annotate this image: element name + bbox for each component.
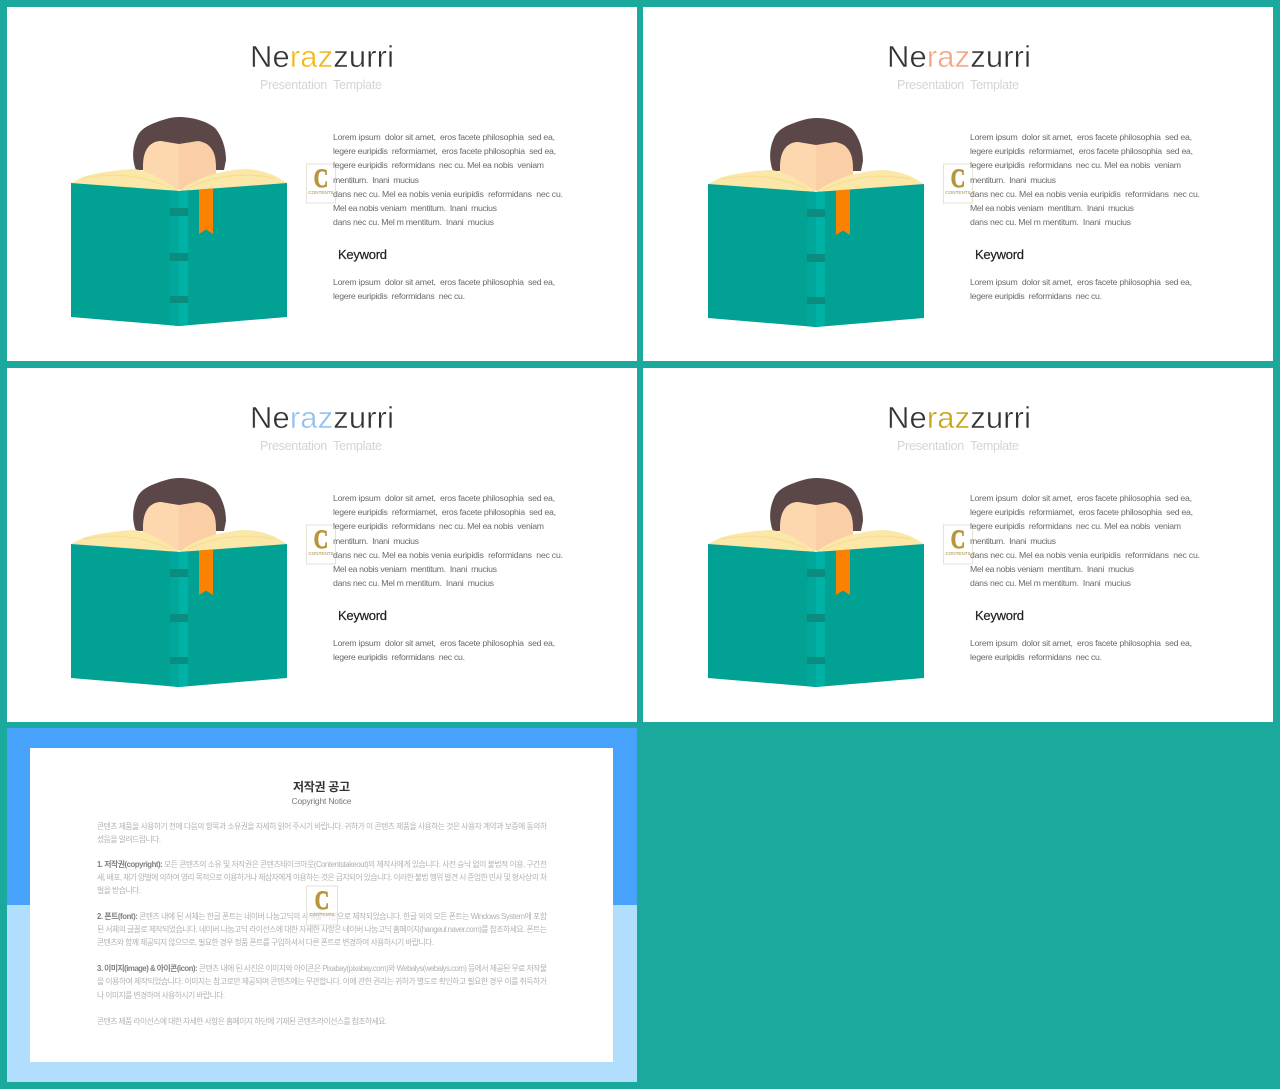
closing note: 콘텐츠 제품 라이선스에 대한 자세한 사항은 홈페이지 하단에 기재된 콘텐츠라이선스를 참조하세요. <box>97 1016 387 1026</box>
panel: slide 4 <box>643 368 1273 722</box>
title: Nerazzurri <box>250 39 394 74</box>
body text: legere euripidis reformiamet, eros facete philosophia sed ea, <box>970 507 1193 517</box>
section 2: font: 2. 폰트(font): 콘텐츠 내에 된 서체는 한글 폰트는 네이버 나눔고딕의 서체를 기반으로 제작되었습니다. 한글 외의 모든 폰트는 Windows System에 포함 <box>97 911 547 921</box>
intro text: 콘텐츠 제품을 사용하기 전에 다음의 항목과 소유권을 자세히 읽어 주시기 바랍니다. 귀하가 이 콘텐츠 제품을 사용하는 것은 사용자 계약과 보증에 동의하 <box>97 821 547 831</box>
body text <box>970 132 1200 227</box>
body text: dans nec cu. Mel ea nobis venia euripidis reformidans nec cu. <box>970 550 1200 560</box>
illustration: person reading book <box>708 478 924 687</box>
watermark logo: CONTENTS <box>945 190 971 195</box>
body text: legere euripidis reformiamet, eros facete philosophia sed ea, <box>333 146 556 156</box>
watermark logo <box>306 886 338 925</box>
body text: mentitum. Inani mucius <box>333 175 420 185</box>
title: Nerazzurri <box>887 39 1031 74</box>
section 2: font: 콘텐츠와 함께 제공되지 않으므로, 필요한 경우 정품 폰트를 구입하셔서 다른 폰트로 변경하여 사용하시기 바랍니다. <box>97 937 434 947</box>
body text: Lorem ipsum dolor sit amet, eros facete philosophia sed ea, <box>333 493 555 503</box>
panel: slide 3 <box>7 368 637 722</box>
watermark logo <box>306 164 336 203</box>
keyword heading: Keyword <box>338 608 387 623</box>
body text: dans nec cu. Mel ea nobis venia euripidis reformidans nec cu. <box>333 189 563 199</box>
title: Nerazzurri <box>887 400 1031 435</box>
illustration: person reading book <box>708 118 924 327</box>
intro text <box>97 821 547 844</box>
body text: dans nec cu. Mel ea nobis venia euripidis reformidans nec cu. <box>970 189 1200 199</box>
section 1: copyright: 벌을 받습니다. <box>97 885 141 895</box>
subtitle: Presentation Template <box>260 78 382 92</box>
section 2: font: 된 서체의 글꼴로 제작되었습니다. 네이버 나눔고딕 라이선스에 대한 자세한 사항은 네이버 나눔고딕 홈페이지(hangeul.naver.com)를 참조하세요. 폰트는 <box>97 924 547 934</box>
notice heading: 저작권 공고 <box>293 779 350 794</box>
body text: Mel ea nobis veniam mentitum. Inani mucius <box>970 203 1135 213</box>
body text: dans nec cu. Mel m mentitum. Inani mucius <box>970 217 1132 227</box>
body text: mentitum. Inani mucius <box>333 536 420 546</box>
panel: slide 2 <box>643 7 1273 361</box>
watermark logo: CONTENTS <box>309 912 335 917</box>
watermark logo: C <box>314 165 328 194</box>
section 3: image and icon: 나 이미지를 변경하여 사용하시기 바랍니다. <box>97 990 225 1000</box>
watermark logo: C <box>314 526 328 555</box>
keyword text: Lorem ipsum dolor sit amet, eros facete philosophia sed ea, <box>333 638 555 648</box>
section 1: copyright: 세, 배포, 재기 양벌에 의하여 영리 목적으로 이용하거나 제삼자에게 이용하는 것은 금지되어 있습니다. 이러한 불법 행위 발견 시 준엄한 민사 및 형사상의 처 <box>97 872 547 882</box>
title: Nerazzurri <box>250 400 394 435</box>
body text: legere euripidis reformiamet, eros facete philosophia sed ea, <box>970 146 1193 156</box>
body text: Lorem ipsum dolor sit amet, eros facete philosophia sed ea, <box>333 132 555 142</box>
keyword text: legere euripidis reformidans nec cu. <box>970 652 1102 662</box>
body text: mentitum. Inani mucius <box>970 536 1057 546</box>
body text: legere euripidis reformidans nec cu. Mel ea nobis veniam <box>333 160 544 170</box>
keyword text <box>333 638 555 662</box>
body text: legere euripidis reformiamet, eros facete philosophia sed ea, <box>333 507 556 517</box>
panel: slide 1 <box>7 7 637 361</box>
body text: legere euripidis reformidans nec cu. Mel ea nobis veniam <box>333 521 544 531</box>
keyword text <box>970 638 1192 662</box>
watermark logo: CONTENTS <box>308 190 334 195</box>
body text: Mel ea nobis veniam mentitum. Inani mucius <box>333 564 498 574</box>
body text: dans nec cu. Mel m mentitum. Inani mucius <box>970 578 1132 588</box>
watermark logo: CONTENTS <box>945 551 971 556</box>
watermark logo <box>944 164 972 203</box>
body text: legere euripidis reformidans nec cu. Mel ea nobis veniam <box>970 160 1181 170</box>
keyword text: Lorem ipsum dolor sit amet, eros facete philosophia sed ea, <box>970 638 1192 648</box>
body text <box>333 132 563 227</box>
keyword text: legere euripidis reformidans nec cu. <box>333 291 465 301</box>
section 1: copyright: 1. 저작권(copyright): 모든 콘텐츠의 소유 및 저작권은 콘텐츠테이크아웃(Contentstakeout)의 제작사에게 있습니다. 사전 승낙 없이 불법적 이용, 구간전 <box>97 859 547 869</box>
intro text: 셨음을 알려드립니다. <box>97 834 161 844</box>
section 3: image and icon <box>97 963 547 1000</box>
keyword text: legere euripidis reformidans nec cu. <box>970 291 1102 301</box>
body text <box>333 493 563 588</box>
section 3: image and icon: 을 이용하여 제작되었습니다. 이미지는 참고로만 제공되며 콘텐츠에는 무관합니다. 이에 관한 권리는 귀하가 별도로 확인하고 필요한 경우 이를 취득하거 <box>97 976 547 986</box>
watermark logo: CONTENTS <box>308 551 334 556</box>
section 2: font <box>97 911 547 947</box>
watermark logo: C <box>951 526 965 555</box>
keyword text: Lorem ipsum dolor sit amet, eros facete philosophia sed ea, <box>333 277 555 287</box>
body text <box>970 493 1200 588</box>
body text: Mel ea nobis veniam mentitum. Inani mucius <box>970 564 1135 574</box>
keyword text: legere euripidis reformidans nec cu. <box>333 652 465 662</box>
keyword heading: Keyword <box>975 608 1024 623</box>
body text: legere euripidis reformidans nec cu. Mel ea nobis veniam <box>970 521 1181 531</box>
subtitle: Presentation Template <box>897 439 1019 453</box>
keyword text: Lorem ipsum dolor sit amet, eros facete philosophia sed ea, <box>970 277 1192 287</box>
body text: mentitum. Inani mucius <box>970 175 1057 185</box>
watermark logo: C <box>315 887 329 916</box>
keyword heading: Keyword <box>338 247 387 262</box>
body text: Mel ea nobis veniam mentitum. Inani mucius <box>333 203 498 213</box>
body text: dans nec cu. Mel m mentitum. Inani mucius <box>333 217 495 227</box>
panel: copyright notice <box>7 728 637 1082</box>
illustration: person reading book <box>71 478 287 687</box>
keyword text <box>970 277 1192 301</box>
illustration: person reading book <box>71 117 287 326</box>
section 3: image and icon: 3. 이미지(image) & 아이콘(icon): 콘텐츠 내에 된 사진은 이미지와 아이콘은 Pixabay(pixabay.com)와 Webalys(webalys.com) 등에서 제공된 무료 저작물 <box>97 963 547 973</box>
watermark logo: C <box>951 165 965 194</box>
body text: dans nec cu. Mel m mentitum. Inani mucius <box>333 578 495 588</box>
keyword text <box>333 277 555 301</box>
body text: Lorem ipsum dolor sit amet, eros facete philosophia sed ea, <box>970 493 1192 503</box>
subtitle: Presentation Template <box>260 439 382 453</box>
keyword heading: Keyword <box>975 247 1024 262</box>
subtitle: Presentation Template <box>897 78 1019 92</box>
watermark logo <box>306 525 336 564</box>
section 1: copyright <box>97 859 547 895</box>
watermark logo <box>944 525 972 564</box>
notice subheading: Copyright Notice <box>292 796 352 806</box>
body text: Lorem ipsum dolor sit amet, eros facete philosophia sed ea, <box>970 132 1192 142</box>
body text: dans nec cu. Mel ea nobis venia euripidis reformidans nec cu. <box>333 550 563 560</box>
